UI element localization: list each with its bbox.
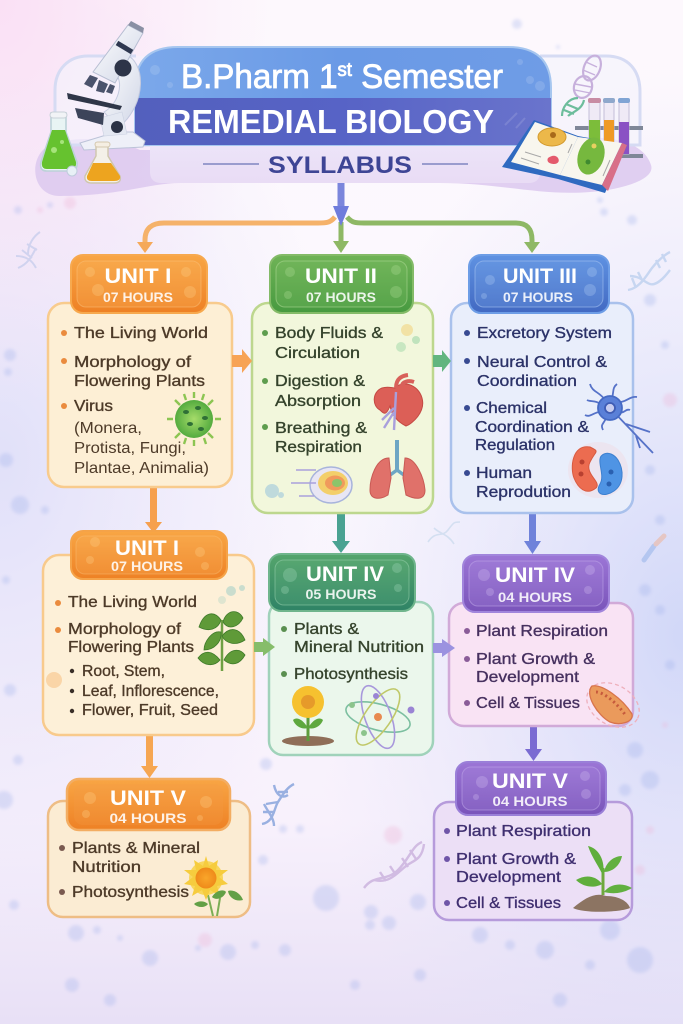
icon: green flask <box>41 112 77 176</box>
unit IV green header <box>269 554 415 611</box>
icon: kidney cell <box>568 442 628 498</box>
unit IV purple topics: Plant Respiration <box>476 623 608 640</box>
icon: orange flask <box>85 142 120 183</box>
icon: atom <box>343 682 414 752</box>
icon: villi disc <box>291 467 352 503</box>
unit II header <box>270 255 413 313</box>
unit I second topics: The Living World <box>68 594 197 611</box>
arrow: unit III down <box>524 513 541 554</box>
panel: unit V orange <box>48 779 250 917</box>
decorative DNA: lower right <box>364 842 424 888</box>
icon: sunflower <box>184 856 243 916</box>
unit IV purple topics <box>464 623 608 712</box>
unit IV green header: 05 HOURS <box>306 586 376 602</box>
arrow: main trunk and branches <box>137 183 540 253</box>
icon: mitochondrion <box>579 674 647 736</box>
unit III topics: Regulation <box>475 437 555 454</box>
arrow: unit II down <box>332 513 350 553</box>
unit II topics: Absorption <box>275 393 361 410</box>
unit I second topics <box>55 594 219 719</box>
unit III header: UNIT III <box>503 265 577 288</box>
unit II header: 07 HOURS <box>306 289 376 305</box>
unit III topics: Coordination & <box>475 419 589 436</box>
panel: unit V purple <box>434 762 632 920</box>
decorative molecule: right mid <box>644 536 664 560</box>
unit III topics: Excretory System <box>477 325 612 342</box>
unit I header: 07 HOURS <box>103 289 173 305</box>
arrow: row two green to purple <box>433 639 455 657</box>
lavender base blob <box>35 137 651 196</box>
unit V purple topics: Cell & Tissues <box>456 895 561 912</box>
unit I second topics: Root, Stem, <box>82 663 165 680</box>
unit I topics: (Monera, <box>74 420 142 437</box>
unit IV purple topics: Development <box>476 669 580 686</box>
unit III topics: Reprodution <box>476 484 571 501</box>
unit II header: UNIT II <box>305 265 377 288</box>
unit V orange header <box>67 779 230 830</box>
unit II topics: Circulation <box>275 345 360 362</box>
decorative DNA: left top <box>16 232 40 268</box>
arrow: row two orange to green <box>254 638 275 656</box>
panel: unit IV purple <box>449 555 647 736</box>
title line 1: B.Pharm 1 <box>181 58 342 96</box>
header banner <box>35 47 651 196</box>
unit I second topics: Morphology of <box>68 621 182 638</box>
unit I second topics: Flowering Plants <box>68 639 194 656</box>
unit V purple topics: Plant Growth & <box>456 851 576 868</box>
unit III topics: Chemical <box>476 400 547 417</box>
unit V orange header: UNIT V <box>110 787 186 810</box>
panel: unit II <box>252 255 433 513</box>
decorative DNA: center lower <box>262 784 294 826</box>
arrow: unit IV down <box>525 726 542 761</box>
icon: plant sprig <box>198 612 245 671</box>
unit II topics: Respiration <box>275 439 362 456</box>
unit I second header: 07 HOURS <box>111 558 183 574</box>
unit I topics <box>61 325 209 477</box>
arrow: unit I to unit II <box>232 349 252 373</box>
panel: unit I (second) <box>43 531 254 735</box>
unit I second header: UNIT I <box>115 537 179 560</box>
unit IV purple header: UNIT IV <box>495 564 575 587</box>
decorative DNA: center mid <box>428 522 460 544</box>
title line 2: REMEDIAL BIOLOGY <box>168 103 494 140</box>
unit I second topics: Leaf, Inflorescence, <box>82 683 219 700</box>
panel: unit I (top) <box>48 255 232 487</box>
unit V orange topics: Nutrition <box>72 859 141 876</box>
unit V orange topics: Photosynthesis <box>72 884 189 901</box>
unit IV green topics <box>281 621 424 683</box>
unit V purple header: UNIT V <box>492 770 568 793</box>
unit II topics: Body Fluids & <box>275 325 383 342</box>
icon: microscope <box>67 21 145 150</box>
unit III header: 07 HOURS <box>503 289 573 305</box>
icon: neuron <box>585 384 653 453</box>
unit IV purple header: 04 HOURS <box>498 589 572 605</box>
pale back frame <box>55 56 640 145</box>
icon: test tubes <box>575 98 643 156</box>
unit IV green topics: Mineral Nutrition <box>294 639 424 656</box>
unit I header: UNIT I <box>104 265 172 288</box>
panel: unit III <box>451 255 653 513</box>
unit III topics: Coordination <box>477 373 577 390</box>
unit V purple header: 04 HOURS <box>492 793 568 809</box>
unit I topics: Protista, Fungi, <box>74 440 186 457</box>
decorative DNA: right upper <box>628 252 670 290</box>
arrow: branch to unit II <box>333 222 349 253</box>
unit V orange topics: Plants & Mineral <box>72 840 200 857</box>
arrow: unit I down <box>145 487 162 533</box>
syllabus strip <box>150 145 540 183</box>
icon: seedling <box>573 846 632 912</box>
icon: open book <box>502 120 627 193</box>
blue title banner <box>135 47 551 145</box>
unit III topics <box>464 325 612 501</box>
unit I header <box>71 255 207 313</box>
unit III topics: Human <box>476 465 532 482</box>
unit I topics: Virus <box>74 398 113 415</box>
unit V purple topics: Plant Respiration <box>456 823 591 840</box>
unit V purple topics: Development <box>456 869 562 886</box>
unit IV green topics: Photosynthesis <box>294 666 408 683</box>
unit I second topics: Flower, Fruit, Seed <box>82 702 218 719</box>
icon: lungs <box>370 440 425 498</box>
unit I topics: Flowering Plants <box>74 373 205 390</box>
unit V purple header <box>456 762 606 815</box>
unit II topics: Digestion & <box>275 373 365 390</box>
unit IV purple topics: Cell & Tissues <box>476 695 580 712</box>
panel: unit IV green <box>269 554 433 755</box>
arrow: branch to unit I <box>137 217 335 253</box>
syllabus label: SYLLABUS <box>268 152 412 179</box>
icon: flower <box>282 686 334 746</box>
title line 1: Semester <box>352 58 503 96</box>
unit V orange header: 04 HOURS <box>110 810 186 826</box>
arrow: unit I lower down <box>141 735 158 778</box>
unit II topics <box>262 325 383 456</box>
icon: DNA helix header <box>562 53 604 116</box>
unit III header <box>469 255 609 313</box>
unit I second header <box>71 531 227 579</box>
unit II topics: Breathing & <box>275 420 367 437</box>
arrow: branch to unit III <box>347 217 540 253</box>
unit III topics: Neural Control & <box>477 354 607 371</box>
unit IV green topics: Plants & <box>294 621 359 638</box>
unit I topics: Morphology of <box>74 354 192 371</box>
unit I topics: Plantae, Animalia) <box>74 460 209 477</box>
title line 1: st <box>338 60 353 81</box>
unit V purple topics <box>444 823 591 912</box>
unit IV purple header <box>463 555 609 612</box>
unit V orange topics <box>59 840 200 901</box>
icon: heart <box>374 375 423 430</box>
arrow: unit II to unit III <box>433 350 451 372</box>
icon: virus <box>167 392 221 446</box>
unit IV purple topics: Plant Growth & <box>476 651 595 668</box>
unit IV green header: UNIT IV <box>306 563 384 586</box>
unit I topics: The Living World <box>74 325 208 342</box>
